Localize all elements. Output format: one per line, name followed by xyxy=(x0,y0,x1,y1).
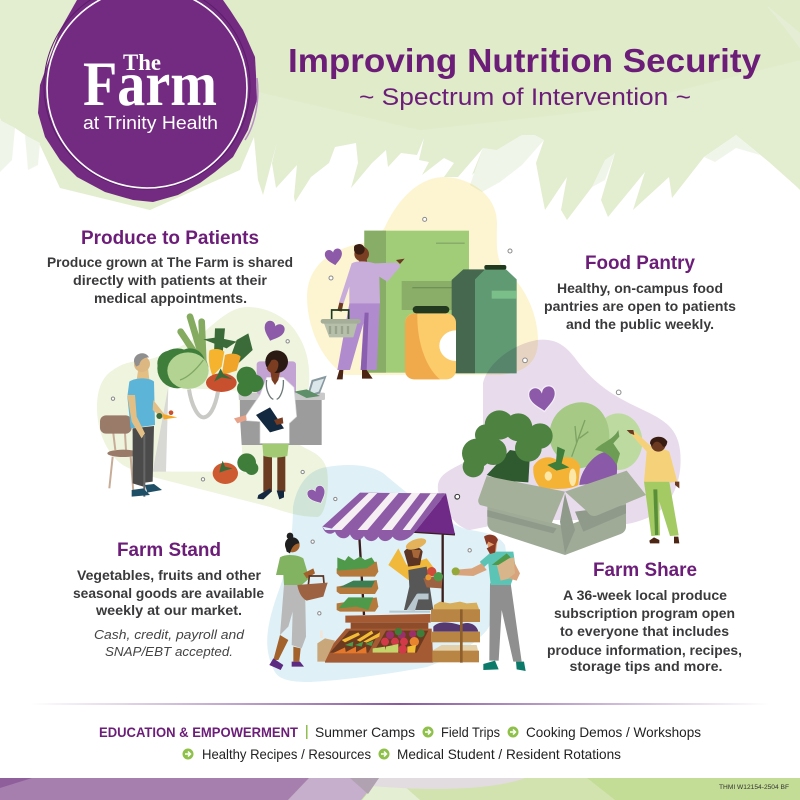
logo text: at Trinity Health xyxy=(83,113,218,133)
education and empowerment list xyxy=(99,724,701,762)
chair xyxy=(100,415,139,492)
green jug xyxy=(452,265,517,373)
heart xyxy=(261,319,286,344)
produce racks xyxy=(337,556,378,612)
bell pepper xyxy=(533,447,580,489)
markers xyxy=(329,217,512,280)
payment note: SNAP/EBT accepted. xyxy=(105,644,233,659)
crates xyxy=(431,602,480,663)
label: EDUCATION & EMPOWERMENT xyxy=(99,724,298,740)
badge blob xyxy=(38,0,257,202)
education and empowerment list: Healthy Recipes / Resources xyxy=(202,746,371,762)
yellow jar xyxy=(405,306,456,379)
arrow icon xyxy=(508,726,518,738)
patient xyxy=(127,353,177,497)
badge ring xyxy=(47,0,247,188)
description: directly with patients at their xyxy=(73,272,268,288)
eggplant xyxy=(579,430,620,485)
vendor xyxy=(388,536,443,610)
illustration: food pantry xyxy=(321,217,517,379)
description: to everyone that includes xyxy=(560,623,729,639)
description xyxy=(47,254,293,306)
cardboard box xyxy=(478,471,646,555)
education and empowerment list: Summer Camps xyxy=(315,724,415,740)
heart xyxy=(324,248,344,267)
description: and the public weekly. xyxy=(566,316,714,332)
footer divider xyxy=(30,703,770,705)
logo badge xyxy=(38,0,258,202)
doctor xyxy=(234,350,297,499)
markers xyxy=(311,494,471,615)
description: storage tips and more. xyxy=(570,658,722,674)
title: Improving Nutrition Security xyxy=(288,43,761,80)
arrow icon xyxy=(378,748,390,760)
stand backdrop blob xyxy=(267,465,506,682)
male shopper xyxy=(452,535,526,671)
market counter xyxy=(317,614,433,663)
heart xyxy=(306,484,329,507)
description: A 36-week local produce xyxy=(563,587,727,603)
cereal box xyxy=(364,231,469,373)
scale xyxy=(389,594,430,613)
payment note xyxy=(94,627,245,659)
heading: Food Pantry xyxy=(585,253,695,274)
section: food pantry xyxy=(544,253,736,332)
logo text: The xyxy=(123,50,161,75)
desk xyxy=(238,361,327,445)
pantry backdrop blob xyxy=(307,177,538,375)
tomato and broccoli xyxy=(213,453,258,484)
description: medical appointments. xyxy=(94,290,247,306)
education and empowerment list: Medical Student / Resident Rotations xyxy=(397,746,621,762)
share customer xyxy=(627,430,679,543)
payment note: Cash, credit, payroll and xyxy=(94,627,245,642)
arrow icon xyxy=(182,748,194,760)
female shopper xyxy=(269,533,328,670)
leafy greens xyxy=(549,402,642,470)
produce backdrop blob xyxy=(97,307,328,517)
broccoli xyxy=(462,410,553,482)
logo text: Farm xyxy=(83,49,217,119)
section: produce to patients xyxy=(47,228,293,306)
bottom color band xyxy=(0,778,800,800)
shopper xyxy=(321,244,405,379)
arrow icon xyxy=(422,726,434,738)
illustration: produce to patients xyxy=(100,317,327,499)
description: produce information, recipes, xyxy=(547,642,742,658)
section: farm stand xyxy=(73,540,264,659)
education and empowerment list: Field Trips xyxy=(441,724,500,740)
heart xyxy=(528,385,558,413)
heading: Farm Share xyxy=(593,560,697,581)
illustration: farm share xyxy=(455,358,679,555)
illustration: farm stand xyxy=(269,484,526,671)
shopping basket xyxy=(321,310,361,337)
description: Vegetables, fruits and other xyxy=(77,567,262,583)
awning xyxy=(322,493,455,541)
markers xyxy=(455,358,621,499)
description xyxy=(544,280,736,332)
education and empowerment list: Cooking Demos / Workshops xyxy=(526,724,701,740)
description xyxy=(547,587,742,674)
heading: Farm Stand xyxy=(117,540,221,561)
food share backdrop blob xyxy=(438,340,681,530)
description xyxy=(73,567,264,618)
grocery tote xyxy=(153,387,243,472)
counter produce xyxy=(333,628,425,654)
description: Produce grown at The Farm is shared xyxy=(47,254,293,270)
print code: THMI W12154-2504 BF xyxy=(719,785,789,791)
section: farm share xyxy=(547,560,742,674)
markers xyxy=(111,340,304,481)
description: weekly at our market. xyxy=(95,602,242,618)
heading: Produce to Patients xyxy=(81,228,259,249)
green watercolor header wash xyxy=(0,0,800,220)
description: pantries are open to patients xyxy=(544,298,736,314)
subtitle: ~ Spectrum of Intervention ~ xyxy=(359,84,691,111)
poles xyxy=(359,493,455,615)
description: subscription program open xyxy=(554,605,735,621)
description: seasonal goods are available xyxy=(73,585,264,601)
produce in tote xyxy=(157,317,264,417)
description: Healthy, on-campus food xyxy=(557,280,723,296)
